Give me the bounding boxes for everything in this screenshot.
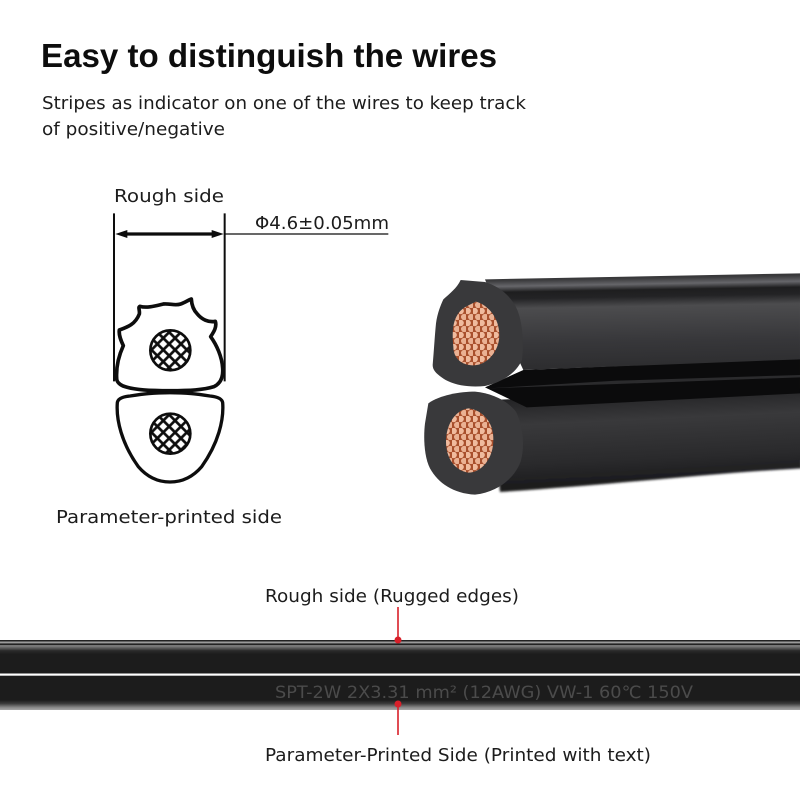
title: Easy to distinguish the wires — [41, 37, 497, 74]
lower copper strands — [446, 408, 493, 473]
label: rough side: Rough side — [114, 186, 224, 207]
lower cable body — [490, 388, 800, 492]
cross-section diagram — [56, 186, 389, 528]
callout: parameter-printed side: Parameter-Printed Side (Printed with text) — [265, 745, 651, 766]
dimension label: Φ4.6±0.05mm — [255, 213, 389, 234]
subtitle text block — [42, 93, 527, 140]
photo: cut cable end — [424, 273, 800, 495]
marker: rough side — [394, 607, 402, 644]
subtitle text block: Stripes as indicator on one of the wires to keep track — [42, 93, 527, 114]
side view wire strip — [0, 640, 800, 710]
label: parameter-printed side: Parameter-printed side — [56, 507, 282, 528]
marker: printed side — [394, 700, 402, 735]
upper conductor — [150, 330, 190, 370]
lower conductor — [150, 414, 190, 454]
callout: rough side: Rough side (Rugged edges) — [265, 586, 519, 607]
upper cable body — [485, 273, 800, 370]
upper end face — [433, 280, 523, 386]
upper wire outline — [117, 299, 223, 391]
subtitle text block: of positive/negative — [42, 119, 225, 140]
groove highlight — [488, 375, 800, 388]
upper copper strands — [453, 302, 499, 365]
printed wire text: SPT-2W 2X3.31 mm² (12AWG) VW-1 60℃ 150V — [275, 683, 693, 703]
wire profile drawing — [114, 213, 388, 482]
lower end face — [424, 392, 523, 495]
groove — [485, 358, 800, 407]
lower wire, printed side — [0, 676, 800, 700]
lower wire outline — [117, 393, 223, 482]
upper wire, rough side — [0, 645, 800, 674]
